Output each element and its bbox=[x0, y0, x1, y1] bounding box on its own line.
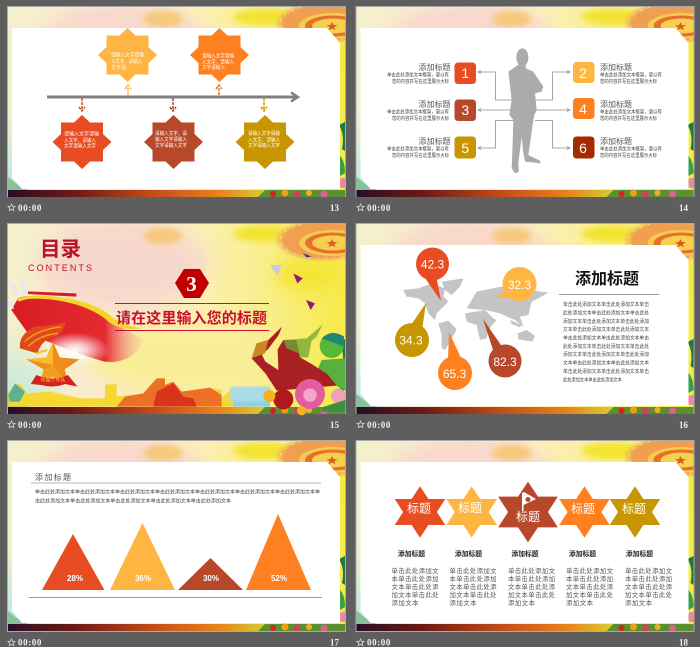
column 3 text bbox=[508, 549, 556, 607]
body text: 添加文本单击此处添加文本单击此处添加 bbox=[563, 318, 649, 325]
column 2 text bbox=[450, 549, 497, 607]
column 5 text: 本单击此处添加 bbox=[625, 574, 672, 583]
slide 17: triangle chart bbox=[8, 435, 374, 632]
column 3 text: 加文本单击此处 bbox=[508, 590, 556, 599]
triangle 52%: 52% bbox=[271, 574, 287, 583]
column 3 text: 文本单击此处添 bbox=[508, 582, 556, 591]
body text: 单击此处添加文本单击此处添加文本单击 bbox=[563, 301, 649, 308]
box 5: 5 bbox=[461, 140, 469, 156]
column 3 text: 添加标题 bbox=[511, 549, 539, 558]
connector lines bbox=[478, 70, 570, 150]
bubble 42.3: 42.3 bbox=[421, 258, 445, 272]
body text bbox=[563, 301, 649, 384]
bottom star 2 bbox=[144, 115, 203, 169]
triangle 28%: 28% bbox=[67, 574, 83, 583]
right text 3: 添加标题 bbox=[600, 136, 632, 146]
column 5 text: 单击此处添加文 bbox=[625, 566, 673, 575]
box 4 bbox=[573, 98, 594, 119]
hexagram 5 bbox=[610, 486, 660, 538]
box 5 bbox=[454, 136, 476, 158]
hexagram 2: 标题 bbox=[458, 501, 482, 515]
hexagram 4: 标题 bbox=[571, 502, 595, 516]
body text: 单击此处添加文本单击此处添加文本单击此处添加文本单击此处添加文本单击此处添加文本单击此处添加文本单击此处添加文本单 bbox=[35, 488, 320, 496]
column 4 text: 单击此处添加文 bbox=[566, 566, 614, 575]
footer slide 14 bbox=[357, 203, 688, 213]
footer slide 15: 15 bbox=[330, 420, 340, 430]
hexagon number: 3 bbox=[186, 272, 197, 296]
bottom star 2: 请输入文字、请 bbox=[155, 130, 187, 137]
column 4 text: 本单击此处添加 bbox=[566, 574, 613, 583]
column 2 text: 单击此处添加文 bbox=[450, 566, 497, 575]
top star 2: 文字请输入 bbox=[202, 64, 225, 71]
column 4 text: 添加标题 bbox=[569, 549, 596, 558]
top star 1: 请输入文字请输 bbox=[111, 52, 144, 58]
left text 2 bbox=[387, 99, 450, 122]
left text 3: 您的内容并写在这里展示大标 bbox=[392, 152, 449, 159]
top star 1: 文字请 bbox=[111, 64, 126, 71]
title: contents bbox=[28, 238, 92, 273]
footer slide 16: 00:00 bbox=[367, 420, 391, 430]
illustration: city skyline bbox=[8, 378, 270, 407]
footer slide 16 bbox=[357, 420, 688, 430]
hexagon number bbox=[175, 269, 209, 298]
box 4: 4 bbox=[579, 101, 587, 117]
bubble 32.3: 32.3 bbox=[508, 278, 532, 292]
left text 3: 单击此处添加文本框架，更以有 bbox=[387, 146, 449, 152]
slide 16: world map data bbox=[356, 218, 700, 414]
column 1 text: 添加标题 bbox=[398, 549, 425, 558]
bubble 42.3 bbox=[416, 248, 449, 301]
left text 1: 您的内容并写在这里展示大标 bbox=[392, 78, 449, 85]
illustration: flying doves bbox=[270, 253, 315, 310]
bottom star 3 bbox=[236, 115, 294, 169]
footer slide 14: 00:00 bbox=[367, 203, 391, 213]
left text 2: 您的内容并写在这里展示大标 bbox=[392, 115, 449, 122]
bubble 34.3: 34.3 bbox=[399, 334, 423, 348]
bubble 65.3: 65.3 bbox=[443, 367, 467, 381]
right text 3: 单击此处添加文本框架，更以有 bbox=[600, 146, 662, 152]
left text 2: 单击此处添加文本框架，更以有 bbox=[387, 108, 449, 116]
dashed connector arrows bbox=[79, 85, 267, 111]
top star 1 bbox=[98, 28, 157, 82]
triangle 52% bbox=[246, 514, 311, 590]
column 4 text bbox=[566, 549, 614, 607]
heading: 添加标题 bbox=[575, 270, 639, 288]
illustration: saluting silhouettes and peonies bbox=[230, 325, 346, 415]
column 5 text: 添加文本 bbox=[625, 598, 653, 607]
bubble 65.3 bbox=[438, 332, 472, 390]
left text 2: 添加标题 bbox=[418, 99, 450, 109]
column 1 text: 文本单击此处添 bbox=[392, 582, 439, 591]
hexagram 5: 标题 bbox=[622, 502, 646, 516]
section heading bbox=[115, 304, 269, 330]
bottom star 3: 请输入文字请输 bbox=[248, 130, 280, 137]
body text: 此处添加文本单击此处添加文本单击此处 bbox=[563, 343, 649, 350]
businessman silhouette bbox=[508, 48, 543, 173]
right text 3 bbox=[600, 136, 662, 159]
body text: 击此处添加文本单击此处添加文本单击此处添加文本单击此处添加文本单击此处添加文本 bbox=[35, 498, 231, 504]
bubble 32.3 bbox=[495, 267, 536, 301]
section heading: 请在这里输入您的标题 bbox=[116, 309, 267, 327]
column 5 text: 文本单击此处添 bbox=[625, 582, 673, 591]
timeline arrow bbox=[47, 92, 298, 102]
box 1: 1 bbox=[461, 65, 469, 81]
column 2 text: 本单击此处添加 bbox=[450, 574, 496, 583]
illustration: flag fan and emblem bbox=[8, 276, 145, 387]
bottom star 1: 请输入文字请输 bbox=[64, 130, 99, 138]
bottom star 3: 文字请输入文字 bbox=[248, 142, 280, 149]
illustration: flag fan and emblem: 中国少先队 bbox=[41, 376, 65, 383]
body text: 文本单击此处添加文本单击此处添加文本 bbox=[563, 360, 649, 366]
bottom star 1: 文字请输入文字 bbox=[64, 142, 96, 150]
top star 2: 入文字、请输入 bbox=[202, 58, 234, 66]
footer slide 17 bbox=[8, 638, 340, 647]
bottom star 2: 输入文字请输入 bbox=[155, 136, 187, 143]
box 1 bbox=[454, 62, 476, 84]
footer slide 15 bbox=[8, 420, 340, 430]
column 5 text: 添加标题 bbox=[626, 549, 653, 558]
title: contents: 目录 bbox=[40, 238, 81, 261]
hexagram 4 bbox=[559, 486, 610, 538]
right text 2: 单击此处添加文本框架，更以有 bbox=[600, 108, 662, 116]
body text: 文本单击此处添加文本单击此处添加文本 bbox=[563, 326, 649, 333]
slide 13: timeline with octagram boxes bbox=[8, 1, 374, 198]
box 2: 2 bbox=[579, 65, 587, 81]
footer slide 13: 00:00 bbox=[18, 203, 42, 213]
column 1 text: 添加文本 bbox=[392, 598, 419, 607]
slide 18: five hexagram columns bbox=[356, 435, 700, 632]
bubble 82.3 bbox=[483, 319, 522, 378]
bottom star 2: 文字请输入文字 bbox=[155, 142, 187, 149]
box 6 bbox=[573, 136, 594, 158]
bubble 34.3 bbox=[395, 303, 429, 357]
body text bbox=[35, 488, 320, 504]
footer slide 18 bbox=[357, 638, 688, 647]
right text 1: 单击此处添加文本框架，更以有 bbox=[600, 72, 662, 78]
hexagram 1 bbox=[395, 486, 445, 538]
column 5 text: 加文本单击此处 bbox=[625, 590, 673, 599]
triangle 30%: 30% bbox=[203, 574, 219, 583]
column 2 text: 添加标题 bbox=[455, 549, 482, 558]
column 1 text bbox=[392, 549, 439, 607]
column 3 text: 添加文本 bbox=[508, 598, 536, 607]
top star 2: 请输入文字请输 bbox=[202, 52, 234, 60]
left text 3: 添加标题 bbox=[418, 136, 450, 146]
top star 2 bbox=[190, 28, 249, 82]
hexagram 2 bbox=[446, 486, 497, 538]
column 2 text: 文本单击此处添 bbox=[450, 582, 497, 591]
left text 1 bbox=[387, 62, 450, 85]
baseline bbox=[29, 596, 322, 598]
heading: 添加标题 bbox=[35, 472, 71, 482]
right text 2: 您的内容并写在这里展示大标 bbox=[600, 115, 657, 122]
right text 1: 您的内容并写在这里展示大标 bbox=[600, 78, 657, 85]
hexagram 1: 标题 bbox=[407, 502, 431, 516]
top star 1: 入文字、请输入 bbox=[111, 58, 142, 65]
divider under heading bbox=[559, 294, 659, 296]
footer slide 13: 13 bbox=[330, 203, 340, 213]
slide 15: contents divider bbox=[8, 218, 374, 415]
box 3 bbox=[454, 100, 476, 121]
title: contents: CONTENTS bbox=[28, 263, 92, 273]
column 4 text: 加文本单击此处 bbox=[566, 590, 614, 599]
left text 3 bbox=[387, 136, 450, 159]
right text 1: 添加标题 bbox=[600, 62, 632, 72]
body text: 单击此处添加文本单击此处添加文本单击 bbox=[563, 334, 649, 342]
body text: 添加文本单击此处添加文本单击此处添加 bbox=[563, 351, 649, 358]
body text: 单击此处添加文本单击此处添加文本单击 bbox=[563, 368, 649, 375]
world map bbox=[403, 278, 548, 350]
box 6: 6 bbox=[579, 140, 587, 156]
column 1 text: 单击此处添加文 bbox=[392, 566, 439, 575]
column 1 text: 本单击此处添加 bbox=[392, 574, 438, 583]
icon: flag bbox=[522, 492, 536, 511]
body text: 此处添加文本单击此处添加文本 bbox=[563, 376, 622, 384]
hexagram 3 with flag icon bbox=[498, 482, 558, 542]
triangle 36% bbox=[110, 523, 175, 590]
footer slide 13 bbox=[8, 203, 340, 213]
column 4 text: 添加文本 bbox=[566, 598, 594, 607]
box 3: 3 bbox=[461, 102, 469, 118]
right text 2: 添加标题 bbox=[600, 99, 632, 109]
box 2 bbox=[573, 62, 594, 83]
bottom star 3: 入文字、请输入 bbox=[248, 136, 280, 144]
column 3 text: 单击此处添加文 bbox=[508, 566, 556, 575]
footer slide 15: 00:00 bbox=[18, 420, 42, 430]
right text 1 bbox=[600, 62, 662, 85]
footer slide 16: 16 bbox=[679, 420, 688, 430]
column 2 text: 加文本单击此处 bbox=[450, 590, 497, 599]
triangle 30% bbox=[178, 558, 243, 590]
bubble 82.3: 82.3 bbox=[493, 355, 517, 369]
heading rule bbox=[31, 482, 321, 484]
right text 3: 您的内容并写在这里展示大标 bbox=[600, 152, 657, 159]
left text 1: 添加标题 bbox=[418, 62, 450, 72]
column 2 text: 添加文本 bbox=[450, 598, 477, 607]
body text: 此处添加文本单击此处添加文本单击此处 bbox=[563, 310, 649, 316]
column 4 text: 文本单击此处添 bbox=[566, 582, 614, 591]
bottom star 1: 入文字、请输入 bbox=[64, 137, 96, 144]
column 1 text: 加文本单击此处 bbox=[392, 590, 439, 599]
left text 1: 单击此处添加文本框架，更以有 bbox=[387, 72, 449, 78]
slide 14: silhouette with six numbered items bbox=[356, 1, 700, 198]
right text 2 bbox=[600, 99, 662, 122]
footer slide 14: 14 bbox=[679, 203, 688, 213]
bottom star 1 bbox=[52, 115, 112, 169]
column 3 text: 本单击此处添加 bbox=[508, 574, 555, 583]
triangle 28% bbox=[42, 534, 104, 590]
triangle 36%: 36% bbox=[135, 574, 151, 583]
column 5 text bbox=[625, 549, 673, 607]
hexagram 3 with flag icon: 标题 bbox=[516, 510, 540, 524]
